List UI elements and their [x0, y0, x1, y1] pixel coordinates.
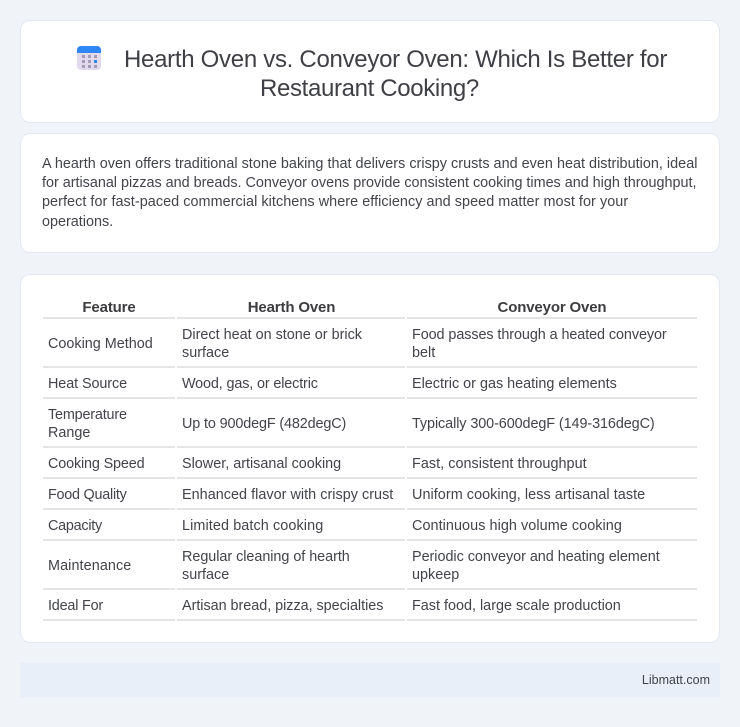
row: capacity	[43, 518, 697, 541]
text block: introduction	[42, 156, 697, 230]
row: ideal for: Artisan bread, pizza, specialties	[182, 598, 383, 614]
row: maintenance: Regular cleaning of hearth	[182, 549, 350, 565]
table header: Hearth Oven	[248, 299, 335, 316]
row: maintenance: upkeep	[412, 567, 459, 583]
table header: Feature	[82, 299, 136, 316]
text block: introduction: operations.	[42, 214, 113, 230]
panel: comparison table	[20, 274, 720, 643]
panel: title card	[20, 20, 720, 123]
icon: calendar	[77, 46, 101, 70]
title: Hearth Oven vs. Conveyor Oven: Which Is Better for	[124, 46, 667, 73]
row: food quality: Uniform cooking, less artisanal taste	[412, 487, 645, 503]
footer bar	[20, 663, 720, 697]
row: ideal for	[43, 598, 697, 621]
table header	[43, 299, 697, 319]
row: ideal for: Fast food, large scale production	[412, 598, 621, 614]
row: cooking method: surface	[182, 345, 229, 361]
panel: introduction	[20, 133, 720, 253]
row: food quality: Enhanced flavor with crispy crust	[182, 487, 393, 503]
row: cooking method: Direct heat on stone or brick	[182, 327, 362, 343]
row: cooking speed: Slower, artisanal cooking	[182, 456, 341, 472]
row: maintenance	[43, 549, 697, 590]
row: heat source: Heat Source	[48, 376, 127, 392]
row: cooking method	[43, 327, 697, 368]
row: food quality	[43, 487, 697, 510]
footer text: Libmatt.com	[642, 673, 710, 687]
title: Restaurant Cooking?	[260, 75, 479, 102]
table header: Conveyor Oven	[498, 299, 606, 316]
row: heat source: Wood, gas, or electric	[182, 376, 318, 392]
row: maintenance: surface	[182, 567, 229, 583]
row: cooking method: belt	[412, 345, 435, 361]
row: temperature range: Up to 900degF (482degC)	[182, 416, 346, 432]
row: capacity: Capacity	[48, 518, 102, 534]
row: cooking speed: Cooking Speed	[48, 456, 144, 472]
text block: introduction: for artisanal pizzas and breads. Conveyor ovens provide consistent cooking times and high throughput,	[42, 175, 696, 191]
row: cooking speed	[43, 456, 697, 479]
row: ideal for: Ideal For	[48, 598, 103, 614]
row: cooking speed: Fast, consistent throughput	[412, 456, 587, 472]
row: temperature range	[43, 407, 697, 448]
row: temperature range: Range	[48, 425, 90, 441]
row: temperature range: Temperature	[48, 407, 127, 423]
row: cooking method: Cooking Method	[48, 336, 153, 352]
row: cooking method: Food passes through a heated conveyor	[412, 327, 667, 343]
row: maintenance: Maintenance	[48, 558, 131, 574]
row: heat source: Electric or gas heating elements	[412, 376, 617, 392]
row: capacity: Limited batch cooking	[182, 518, 323, 534]
row: capacity: Continuous high volume cooking	[412, 518, 622, 534]
row: temperature range: Typically 300-600degF (149-316degC)	[412, 416, 655, 432]
title	[124, 46, 667, 102]
text block: introduction: perfect for fast-paced commercial kitchens where efficiency and speed matter most for your	[42, 194, 628, 210]
row: heat source	[43, 376, 697, 399]
row: maintenance: Periodic conveyor and heating element	[412, 549, 660, 565]
text block: introduction: A hearth oven offers traditional stone baking that delivers crispy crusts and even heat distribution, ideal	[42, 156, 697, 172]
row: food quality: Food Quality	[48, 487, 127, 503]
